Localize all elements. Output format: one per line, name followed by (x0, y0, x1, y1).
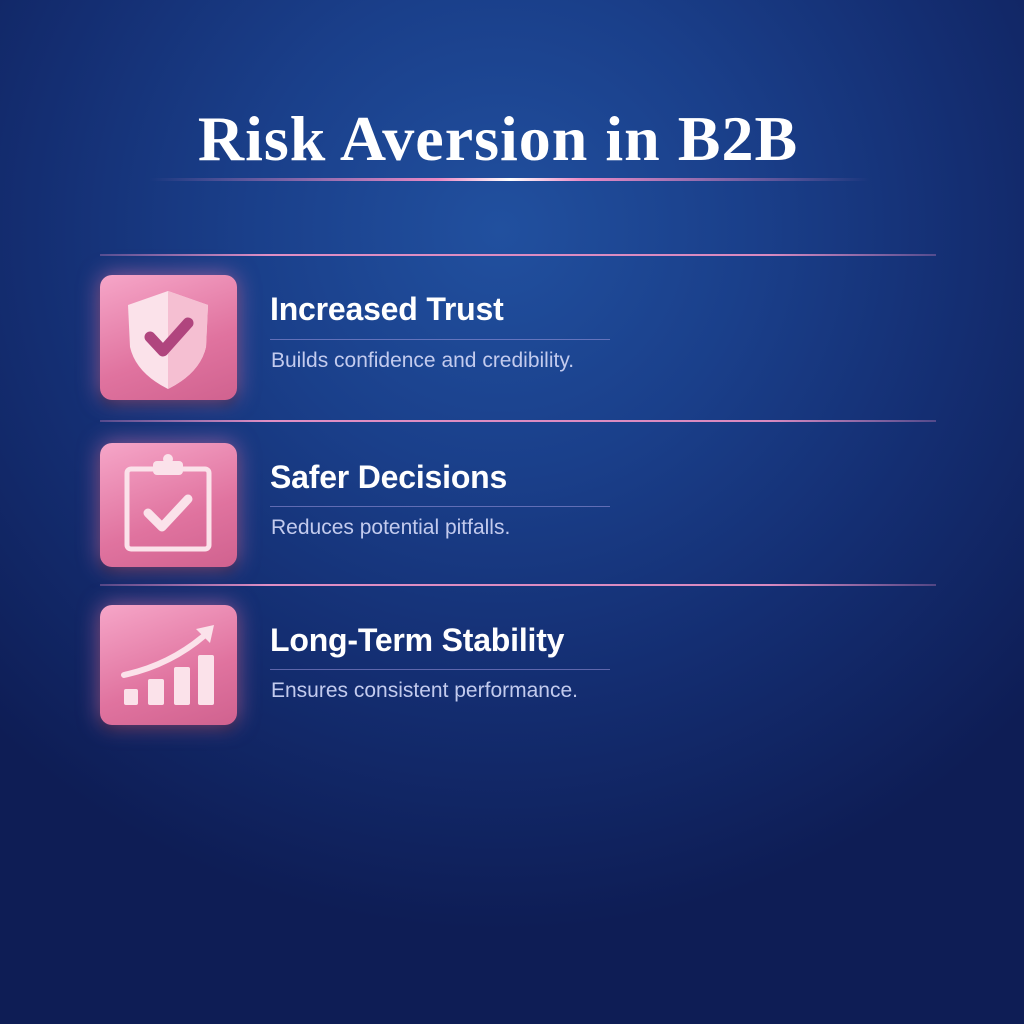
icon: growth chart (100, 605, 237, 725)
text: trust: Builds confidence and credibility. (271, 349, 574, 372)
title: Risk Aversion in B2B (198, 103, 798, 174)
text: stability: Ensures consistent performance. (271, 679, 578, 702)
heading: long-term stability: Long-Term Stability (270, 622, 564, 658)
heading: safer decisions: Safer Decisions (270, 459, 507, 495)
icon: shield (100, 275, 237, 400)
text: decisions: Reduces potential pitfalls. (271, 516, 510, 539)
heading: increased trust: Increased Trust (270, 291, 504, 327)
icon: clipboard (100, 443, 237, 567)
title glow line (150, 178, 870, 181)
